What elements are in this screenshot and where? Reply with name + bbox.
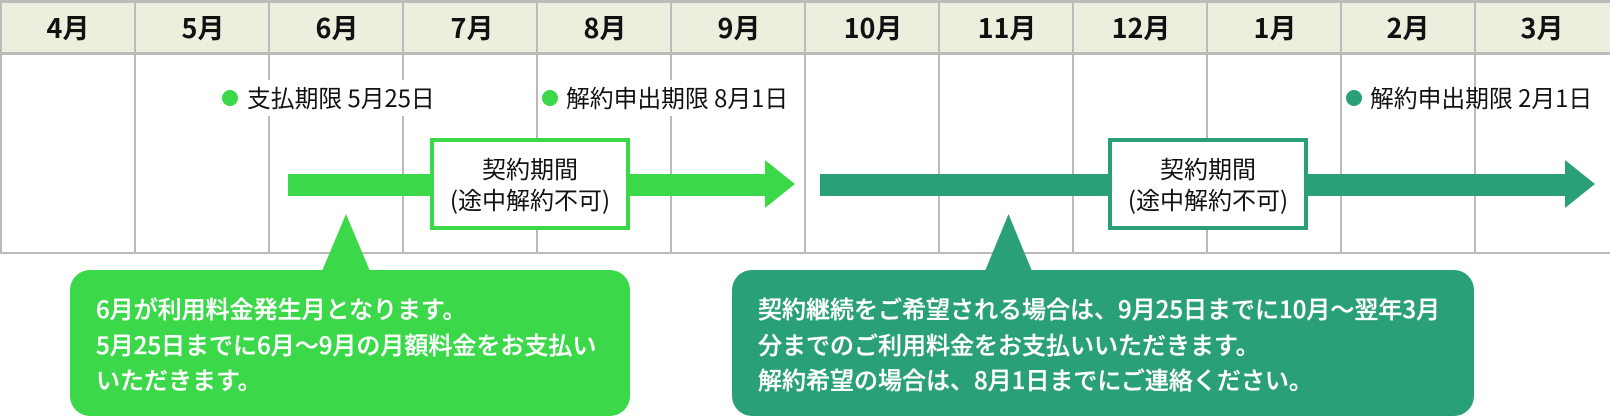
month: March: 3月: [1521, 7, 1563, 46]
month: November: 11月: [978, 7, 1036, 46]
month: August: 8月: [584, 7, 626, 46]
callout: June billing: 6月が利用料金発生月となります。: [96, 290, 467, 325]
arrow: renewal contract period: [820, 160, 1595, 208]
text: payment deadline: 支払期限 5月25日: [247, 79, 435, 114]
label: cancellation deadline February: [1346, 79, 1592, 114]
label: cancellation deadline August: [542, 80, 790, 116]
dot: cancellation deadline February: [1346, 90, 1362, 106]
month: October: 10月: [844, 7, 902, 46]
table bottom border: [0, 252, 1610, 254]
dot: cancellation deadline August: [542, 90, 558, 106]
label: payment deadline: [222, 80, 436, 116]
callout pointer: November: [985, 214, 1032, 270]
callout: renewal and cancellation: 解約希望の場合は、8月1日までにご連絡ください。: [758, 361, 1313, 396]
callout: June billing: いただきます。: [96, 361, 262, 396]
box: first contract period: [430, 138, 630, 230]
callout: June billing: [70, 270, 630, 416]
month: July: 7月: [451, 7, 493, 46]
callout: renewal and cancellation: [732, 270, 1474, 416]
arrow: first contract period: [288, 160, 795, 208]
month: May: 5月: [182, 7, 224, 46]
month: April: 4月: [47, 7, 89, 46]
month: September: 9月: [718, 7, 760, 46]
callout: renewal and cancellation: 分までのご利用料金をお支払いいただきます。: [758, 326, 1260, 360]
month: December: 12月: [1112, 7, 1170, 46]
month: June: 6月: [316, 7, 358, 46]
month header band: [0, 0, 1610, 55]
callout: June billing: 5月25日までに6月〜9月の月額料金をお支払い: [96, 326, 596, 360]
box: renewal contract period: (途中解約不可): [1128, 181, 1288, 216]
box: first contract period: 契約期間: [482, 150, 578, 185]
text: cancellation deadline August: 解約申出期限 8月1日: [566, 79, 788, 114]
box: renewal contract period: [1108, 138, 1308, 230]
box: renewal contract period: 契約期間: [1160, 150, 1256, 185]
callout: renewal and cancellation: 契約継続をご希望される場合は、9月25日までに10月〜翌年3月: [758, 290, 1440, 325]
callout pointer: June: [322, 214, 370, 270]
dot: payment deadline: [222, 90, 238, 106]
box: first contract period: (途中解約不可): [450, 181, 610, 216]
month: February: 2月: [1387, 7, 1429, 46]
text: cancellation deadline February: 解約申出期限 2月1日: [1370, 79, 1592, 114]
month: January: 1月: [1254, 7, 1296, 46]
